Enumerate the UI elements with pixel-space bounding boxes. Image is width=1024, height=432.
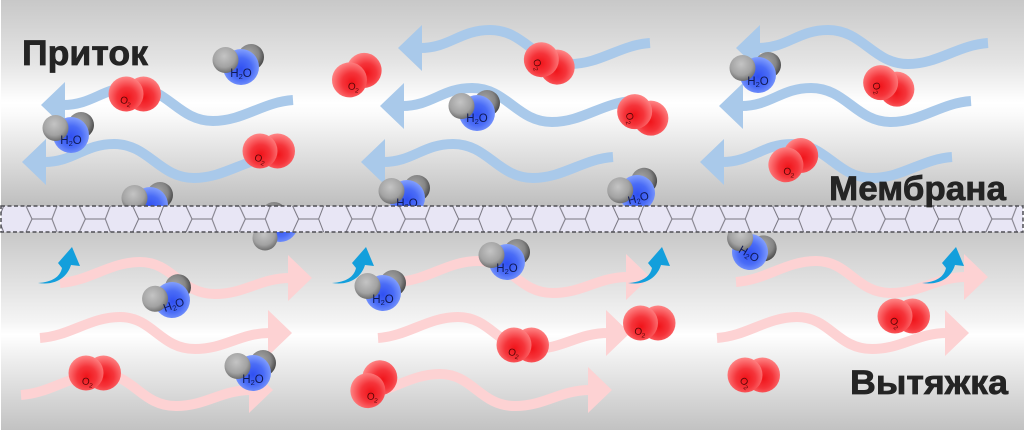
oxygen molecules: 2: [514, 354, 520, 361]
label: exhaust: Вытяжка: [850, 364, 1009, 402]
water molecules: H: [496, 263, 505, 275]
water molecules: O: [409, 198, 418, 210]
water molecules: 2: [171, 303, 178, 313]
membrane: [1, 206, 1023, 232]
moisture transfer arrows: [38, 247, 964, 284]
water molecules: 2: [475, 117, 479, 126]
water molecules: O: [73, 135, 82, 147]
oxygen molecules: O: [623, 111, 635, 122]
label: intake: Приток: [22, 34, 148, 73]
oxygen molecules: O: [119, 95, 129, 107]
oxygen molecules: 2: [126, 102, 132, 109]
water molecules: 2: [381, 298, 385, 307]
oxygen molecules: 2: [641, 332, 646, 340]
water molecules: H: [60, 135, 69, 147]
water molecules: H: [627, 194, 638, 207]
oxygen molecules: 2: [88, 382, 94, 390]
intake airflow arrows: [22, 25, 988, 185]
oxygen molecules: 2: [354, 87, 360, 95]
water molecules: O: [479, 113, 488, 125]
water molecules: O: [255, 374, 264, 386]
background: intake duct: [1, 0, 1024, 206]
water molecules: H: [466, 113, 475, 125]
oxygen molecules: 2: [892, 324, 899, 332]
background: exhaust duct: [1, 232, 1024, 430]
water molecules: 2: [756, 80, 760, 89]
water molecules: 2: [251, 378, 255, 387]
oxygen molecules: O: [782, 166, 792, 178]
oxygen molecules: O: [869, 81, 882, 92]
water molecules: O: [243, 68, 252, 80]
oxygen molecules: O: [253, 153, 264, 166]
water molecules: 2: [743, 252, 751, 262]
oxygen molecules: [68, 36, 930, 415]
label: membrane: Мембрана: [829, 170, 1007, 208]
water molecules: O: [174, 296, 186, 311]
water molecules: 2: [405, 202, 409, 211]
oxygen molecules: 2: [624, 120, 631, 126]
oxygen molecules: O: [530, 58, 543, 68]
oxygen molecules: 2: [742, 384, 749, 392]
oxygen molecules: O: [633, 326, 643, 338]
oxygen molecules: 2: [871, 90, 879, 96]
water molecules: O: [639, 190, 651, 204]
water molecules: O: [509, 263, 518, 275]
water molecules: H: [372, 294, 381, 306]
oxygen molecules: O: [507, 347, 517, 359]
water molecules: 2: [505, 267, 509, 276]
water molecules: H: [162, 301, 174, 315]
oxygen molecules: 2: [790, 172, 795, 180]
exhaust airflow arrows: [21, 254, 988, 413]
oxygen molecules: 2: [531, 67, 539, 72]
water molecules: H: [242, 374, 251, 386]
water molecules: H: [230, 68, 239, 80]
water molecules: H: [747, 76, 756, 88]
oxygen molecules: 2: [373, 397, 379, 405]
water molecules: 2: [239, 72, 243, 81]
water molecules: H: [396, 198, 405, 210]
water molecules: O: [760, 76, 769, 88]
water molecules: H: [736, 244, 749, 259]
oxygen molecules: O: [887, 315, 900, 329]
oxygen molecules: O: [81, 376, 90, 388]
water molecules: [42, 44, 781, 391]
oxygen molecules: O: [737, 375, 750, 389]
oxygen molecules: O: [366, 391, 375, 403]
water molecules: O: [385, 294, 394, 306]
water molecules: 2: [636, 196, 642, 206]
oxygen molecules: O: [347, 81, 356, 93]
water molecules: 2: [69, 139, 73, 148]
oxygen molecules: 2: [260, 160, 266, 168]
water molecules: O: [747, 250, 761, 265]
